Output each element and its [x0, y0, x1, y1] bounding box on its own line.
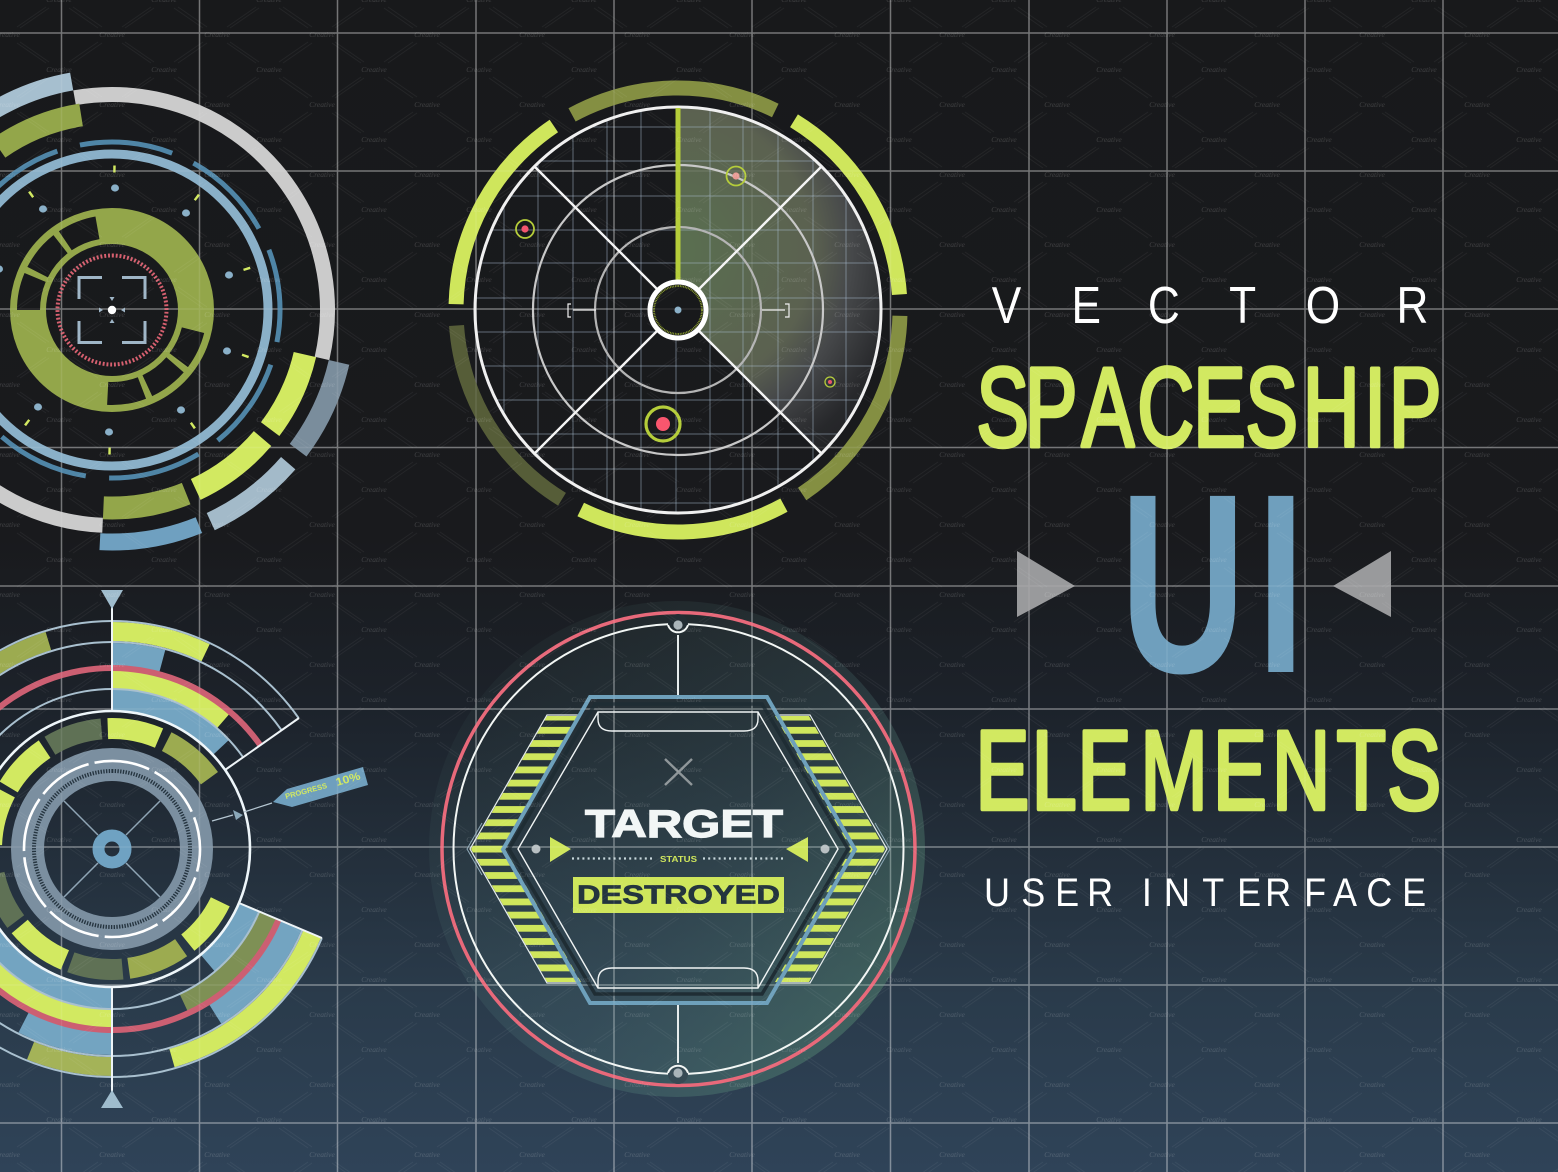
outer rings: [442, 612, 915, 1086]
progress callout: PROGRESS: [284, 781, 328, 801]
heading: ELEMENTS: ELEMENTS: [976, 708, 1441, 833]
top and bottom nodes: [668, 614, 688, 1084]
indicator dots: [0, 184, 233, 436]
progress callout: 10%: [335, 770, 362, 789]
axis triangles: [101, 590, 123, 1108]
radar fine grid: [470, 100, 890, 520]
heading: VECTOR: VECTOR: [992, 277, 1428, 335]
radar outer segments: [373, 5, 983, 615]
cross mark: [665, 759, 692, 785]
destroyed banner: DESTROYED: [577, 882, 780, 910]
heading: USER INTERFACE: USER INTERFACE: [984, 871, 1426, 915]
heading: SPACESHIP: SPACESHIP: [977, 345, 1441, 470]
focus brackets: [79, 278, 145, 342]
progress callout: [212, 767, 368, 821]
title: TARGET: TARGET: [585, 803, 783, 846]
target blips: [516, 166, 835, 441]
radar sweep: [678, 107, 881, 454]
hub and spokes: [64, 801, 160, 897]
panel: radar: [448, 80, 908, 540]
range brackets: [568, 304, 789, 317]
panel: circular HUD top left: [0, 0, 441, 639]
wedge arcs: [0, 531, 430, 1167]
pointer markers: [532, 837, 830, 862]
heading: UI: UI: [1120, 442, 1305, 727]
wedge edges and axis: [112, 600, 322, 1100]
heading block: [976, 277, 1441, 915]
segmented rings top left: [0, 0, 441, 639]
inner cell ring: [0, 680, 281, 1018]
status line: STATUS: [660, 854, 697, 864]
striped chevrons: [467, 715, 890, 983]
radar rings and spokes: [475, 107, 881, 513]
panel: target destroyed badge: [429, 601, 925, 1097]
arrows beside UI: [1017, 551, 1391, 617]
panel: circular progress HUD bottom left: [0, 531, 430, 1167]
hexagon frame: [503, 697, 855, 1003]
glow disk: [429, 601, 925, 1097]
destroyed banner: [573, 877, 784, 913]
centre crosshair: [99, 297, 125, 323]
